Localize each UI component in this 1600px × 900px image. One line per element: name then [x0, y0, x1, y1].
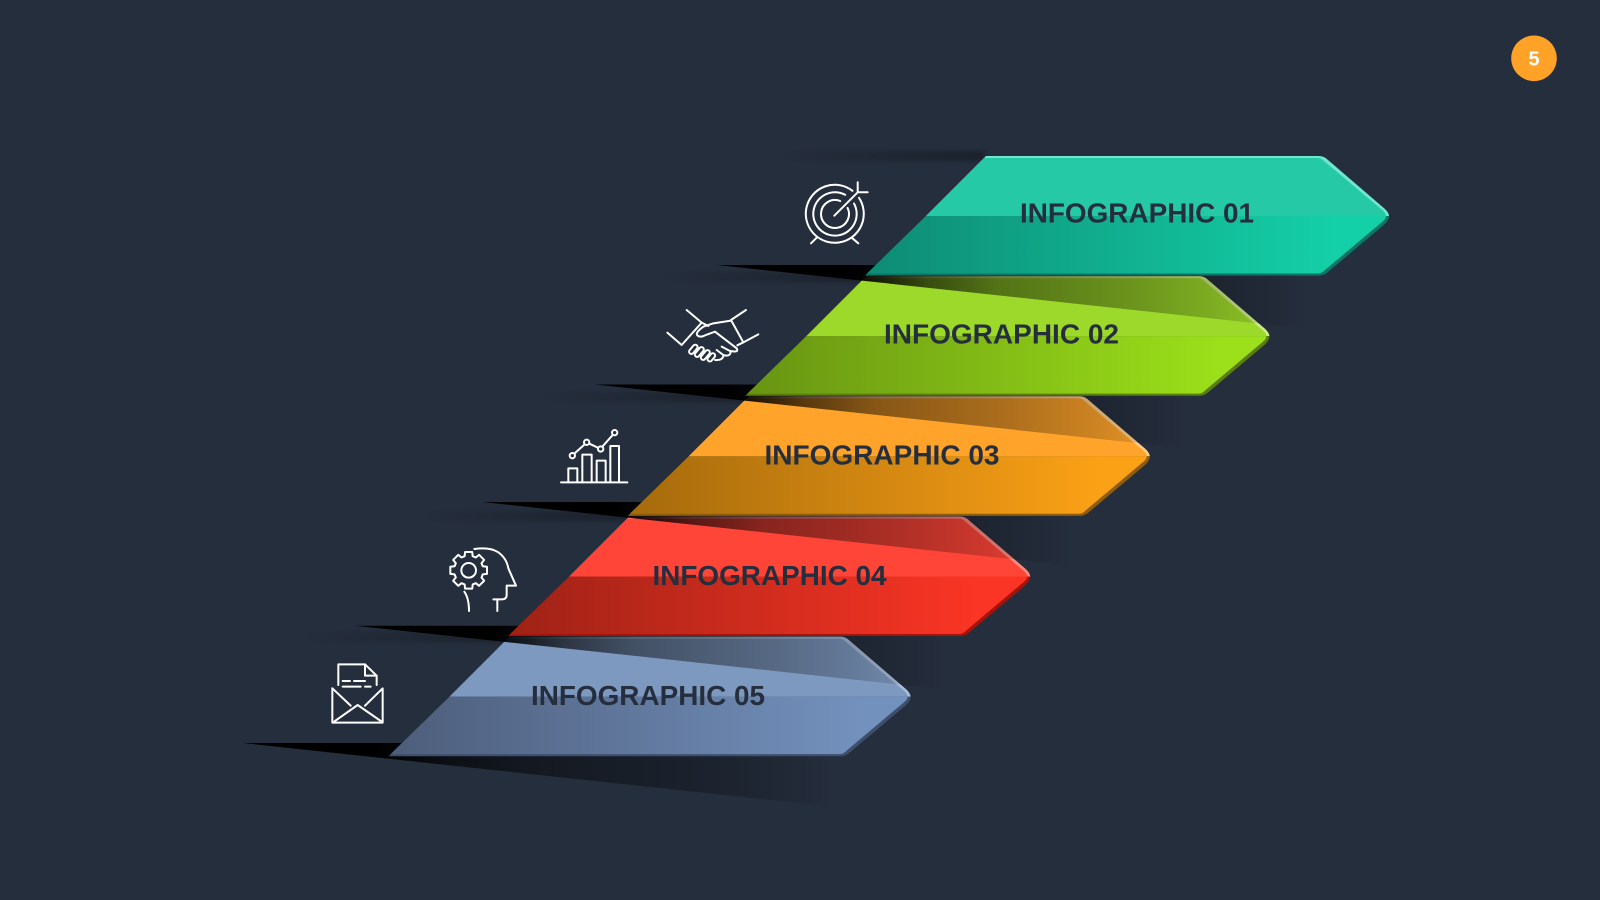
arrow 5: blue: INFOGRAPHIC 05 [531, 680, 765, 711]
arrow 4: red: INFOGRAPHIC 04 [652, 560, 887, 591]
arrow 5: blue [389, 637, 911, 756]
shadow cast by arrow 3 [483, 392, 1073, 566]
shadow cast by arrow 1 [717, 151, 1307, 329]
shadow cast by arrow 4 [355, 511, 945, 689]
shadow cast by arrow 2 [595, 272, 1185, 448]
shadow below arrow 5 [243, 632, 833, 807]
icon: target with arrow [806, 182, 868, 243]
icon: envelope with letter [332, 664, 383, 723]
page number badge [1511, 36, 1557, 81]
arrow 2: lime: INFOGRAPHIC 02 [884, 318, 1119, 350]
arrow 1: teal: INFOGRAPHIC 01 [1020, 198, 1254, 229]
icon: handshake [667, 310, 758, 362]
page number badge: 5 [1528, 48, 1540, 70]
icon: bar and line chart [561, 430, 627, 482]
icon: head with gear [450, 548, 516, 611]
arrow 1: teal [865, 156, 1389, 276]
arrow 4: red [508, 516, 1030, 636]
arrow 2: lime [745, 276, 1269, 396]
arrow 3: orange [628, 396, 1150, 516]
arrow 3: orange: INFOGRAPHIC 03 [764, 440, 1000, 470]
